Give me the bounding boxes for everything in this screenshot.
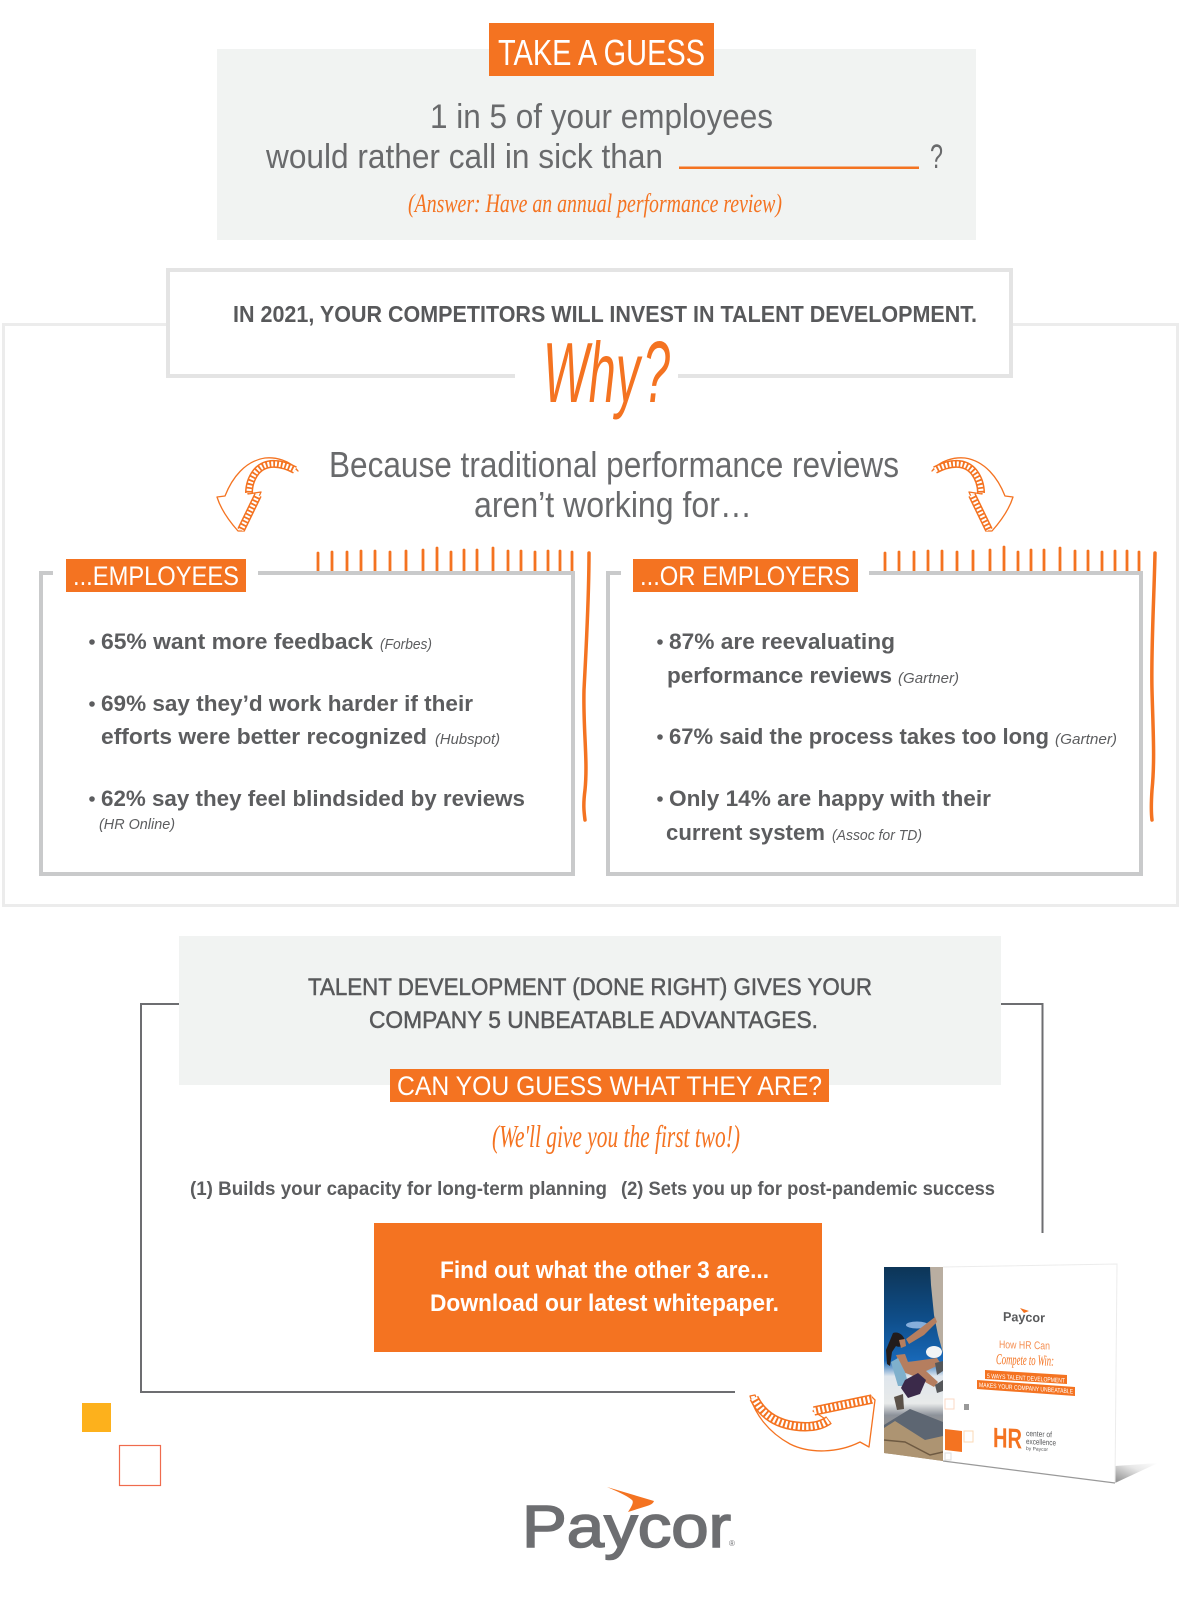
- cover banner: [977, 1370, 1075, 1396]
- heading badge: take a guess: [489, 23, 714, 76]
- question text: [265, 98, 943, 176]
- photo: climber on cliff: [884, 1267, 944, 1462]
- first two advantages: (1) Builds your capacity for long-term planning: [190, 1178, 607, 1200]
- cover decorative squares: [945, 1399, 973, 1460]
- stat: 14% happy: [657, 786, 991, 845]
- advantages gray box: [179, 936, 1001, 1085]
- answer text: (Answer: Have an annual performance review): [408, 189, 782, 218]
- panel: employers: [608, 547, 1155, 874]
- cover banner: 5 WAYS TALENT DEVELOPMENT: [987, 1373, 1065, 1385]
- arrow: left curved: [217, 458, 298, 531]
- cover title: [996, 1339, 1054, 1370]
- cover logo: Paycor: [1003, 1309, 1045, 1325]
- paycor logo: ®: [729, 1539, 735, 1548]
- advantages gray box: COMPANY 5 UNBEATABLE ADVANTAGES.: [369, 1007, 818, 1034]
- because text: Because traditional performance reviews: [329, 444, 899, 485]
- stat: 62% blindsided: 62% say they feel blindsided by reviews: [101, 786, 525, 811]
- advantages gray box: TALENT DEVELOPMENT (DONE RIGHT) GIVES YOUR: [308, 974, 872, 1001]
- because text: aren’t working for…: [474, 484, 752, 525]
- decorative yellow square: [82, 1403, 111, 1432]
- stat: 67% too long: (Gartner): [1055, 731, 1117, 748]
- stat: 62% blindsided: [89, 786, 525, 833]
- first two advantages: [190, 1178, 995, 1200]
- stat: 65% feedback: 65% want more feedback: [101, 629, 374, 654]
- stat: 67% too long: 67% said the process takes too long: [669, 724, 1049, 749]
- handwritten why: Why: [543, 325, 643, 420]
- badge: can you guess: CAN YOU GUESS WHAT THEY ARE?: [397, 1071, 822, 1101]
- arrow: to whitepaper: [750, 1395, 875, 1451]
- first two advantages: (2) Sets you up for post-pandemic success: [621, 1178, 995, 1200]
- stat: 87% reevaluating: performance reviews: [667, 663, 892, 688]
- question text: would rather call in sick than: [265, 138, 663, 176]
- stat: 65% feedback: (Forbes): [380, 636, 432, 653]
- cover center of excellence logo: [993, 1422, 1056, 1454]
- stat: 14% happy: Only 14% are happy with their: [669, 786, 991, 811]
- handwritten why: ?: [643, 323, 670, 421]
- cover center of excellence logo: HR: [993, 1422, 1022, 1454]
- decorative outlined square: [120, 1446, 160, 1486]
- stat: 14% happy: (Assoc for TD): [832, 827, 922, 844]
- stat: 69% recognized: (Hubspot): [435, 731, 500, 748]
- because text: [329, 444, 899, 525]
- whitepaper cover: [884, 1264, 1158, 1483]
- competitors headline box: [168, 270, 1011, 380]
- stat: 87% reevaluating: (Gartner): [898, 670, 959, 687]
- badge: employees: ...EMPLOYEES: [73, 561, 239, 591]
- stat: 62% blindsided: (HR Online): [99, 816, 175, 833]
- cover banner: MAKES YOUR COMPANY UNBEATABLE: [979, 1382, 1074, 1396]
- cover title: How HR Can: [999, 1339, 1050, 1353]
- call to action button: Find out what the other 3 are...: [440, 1257, 769, 1284]
- badge: or employers: ...OR EMPLOYERS: [640, 561, 850, 591]
- cover center of excellence logo: excellence: [1026, 1437, 1056, 1448]
- handwritten note: (We'll give you the first two!): [492, 1118, 740, 1154]
- paycor logo: Paycor: [522, 1494, 731, 1560]
- question text: 1 in 5 of your employees: [430, 98, 773, 136]
- cover center of excellence logo: by Paycor: [1026, 1446, 1048, 1453]
- panel: advantages frame: [141, 936, 1042, 1392]
- question text: ?: [930, 138, 943, 176]
- heading badge: take a guess: TAKE A GUESS: [498, 32, 705, 73]
- arrow: right curved: [932, 458, 1013, 531]
- stat: 14% happy: current system: [666, 820, 825, 845]
- cover center of excellence logo: center of: [1026, 1429, 1053, 1439]
- stat: 69% recognized: 69% say they’d work harder if their: [101, 691, 473, 716]
- stat: 87% reevaluating: 87% are reevaluating: [669, 629, 895, 654]
- panel: why frame: [4, 270, 1178, 906]
- competitors headline box: IN 2021, YOUR COMPETITORS WILL INVEST IN TALENT DEVELOPMENT.: [233, 301, 977, 327]
- stat: 69% recognized: [89, 691, 500, 749]
- call to action button: Download our latest whitepaper.: [430, 1290, 779, 1317]
- panel: take a guess: [217, 23, 976, 240]
- stat: 69% recognized: efforts were better recognized: [101, 724, 427, 749]
- cover title: Compete to Win:: [996, 1352, 1054, 1370]
- call to action button: [374, 1223, 822, 1352]
- stat: 87% reevaluating: [657, 629, 959, 688]
- panel: employees: [41, 548, 589, 874]
